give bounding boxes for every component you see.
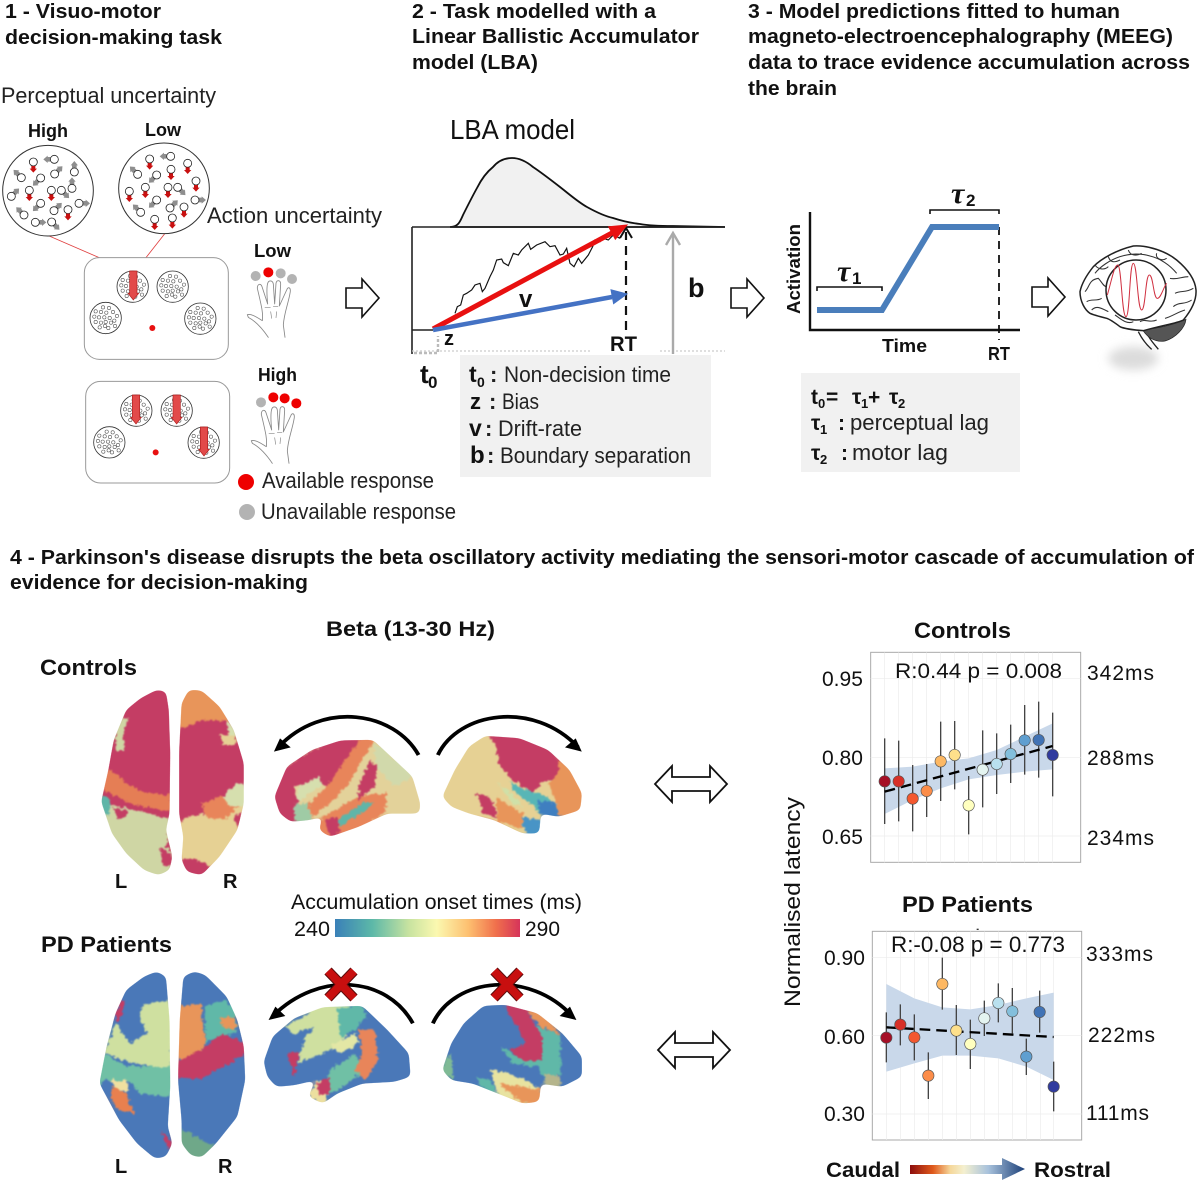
- low uncertainty dot cloud: [119, 143, 209, 234]
- colour scale: Accumulation onset times (ms): [291, 891, 582, 914]
- parameter key box: Bias: [502, 389, 539, 414]
- right ticks: 333ms: [1086, 943, 1153, 966]
- RT dashed line: [620, 228, 632, 330]
- equation key box: [801, 373, 1020, 472]
- label: low action: Low: [254, 241, 292, 261]
- equation key box: :: [838, 412, 845, 435]
- activation chart: τ: [951, 177, 966, 210]
- equation key box: 0: [818, 396, 825, 411]
- arrow: task to model: [346, 279, 379, 317]
- label: RT: RT: [610, 333, 637, 356]
- parameter key box: z: [470, 389, 481, 414]
- heading 1: [5, 1, 223, 49]
- double arrow: controls: [655, 766, 727, 802]
- statistics: R:-0.08 p = 0.773: [891, 932, 1065, 957]
- brain: PD lateral right: [443, 1005, 582, 1104]
- L/R labels: controls: L: [115, 871, 127, 893]
- statistics: R:0.44 p = 0.008: [895, 660, 1062, 683]
- chart: PD patients: [824, 892, 1155, 1140]
- LBA diagram axes: [412, 227, 725, 354]
- left ticks: 0.65: [822, 826, 863, 849]
- arrow: b boundary: [666, 233, 680, 354]
- heading 2: [412, 1, 699, 74]
- chart plot area: [872, 929, 1082, 1140]
- high uncertainty dot cloud: [3, 145, 93, 236]
- brain: PD top right: [178, 972, 246, 1157]
- heading 3: the brain: [748, 78, 837, 100]
- label: high perceptual: High: [28, 121, 68, 141]
- panel 3: model predictions: [748, 1, 1196, 472]
- panel 4: brain maps: [40, 618, 587, 1178]
- parameter key box: t: [469, 361, 477, 387]
- screen: low action uncertainty: [84, 258, 228, 359]
- caudal to rostral gradient arrow: Caudal: [826, 1159, 900, 1182]
- right ticks: 234ms: [1087, 827, 1154, 850]
- equation key box: +: [868, 386, 880, 409]
- brain: controls top left: [102, 690, 172, 874]
- left ticks: [822, 668, 863, 849]
- label: perceptual uncertainty: Perceptual uncertainty: [1, 83, 216, 108]
- label: high action: High: [258, 365, 297, 385]
- panel 1: visuo-motor task: [1, 1, 456, 524]
- caudal to rostral gradient arrow: Rostral: [1034, 1159, 1111, 1182]
- right ticks: 288ms: [1087, 747, 1154, 770]
- heading 4: [10, 547, 1194, 594]
- brains: PD patients: [94, 967, 587, 1163]
- parameter key box: :: [485, 416, 492, 441]
- connector lines: [48, 233, 165, 272]
- heading 3: [748, 1, 1190, 100]
- L/R labels: PD: L: [115, 1156, 127, 1178]
- colour scale: 290: [525, 918, 560, 941]
- right ticks: [1086, 943, 1155, 1125]
- heading 3: magneto-electroencephalography (MEEG): [748, 26, 1173, 48]
- parameter key box: 0: [477, 374, 485, 390]
- screen: high action uncertainty: [86, 381, 230, 483]
- heading 1: 1 - Visuo-motor: [5, 1, 161, 23]
- label: b: b: [688, 273, 704, 303]
- cross mark: left: [328, 971, 354, 998]
- label: action uncertainty: Action uncertainty: [207, 203, 382, 228]
- L/R labels: PD: R: [218, 1156, 233, 1178]
- L/R labels: PD: [115, 1156, 233, 1178]
- heading 4: 4 - Parkinson's disease disrupts the beta oscillatory activity mediating the sensori-motor cascade of accumulation of: [10, 547, 1194, 569]
- parameter key box: Drift-rate: [498, 416, 582, 441]
- curved arrow: PD right: [433, 985, 576, 1023]
- legend: Unavailable response: [261, 499, 456, 524]
- curved arrow: PD left: [269, 985, 413, 1023]
- equation key box: t: [811, 386, 818, 409]
- equation key box: =: [826, 386, 838, 409]
- parameter key box: :: [490, 362, 497, 387]
- colour scale: 240: [294, 918, 330, 941]
- equation key box: τ: [811, 412, 821, 435]
- L/R labels: controls: R: [223, 871, 238, 893]
- heading 2: Linear Ballistic Accumulator: [412, 26, 699, 48]
- left ticks: 0.30: [824, 1103, 865, 1126]
- left ticks: 0.95: [822, 668, 863, 691]
- heading 1: decision-making task: [5, 27, 223, 49]
- label: controls: Controls: [40, 655, 137, 680]
- parameter key box: Boundary separation: [500, 443, 691, 468]
- activation chart: 1: [852, 269, 861, 288]
- title: beta band: Beta (13-30 Hz): [326, 618, 495, 641]
- equation key box: 2: [898, 396, 905, 411]
- legend: Available response: [262, 468, 434, 493]
- brains: controls: [91, 680, 587, 883]
- heading 4: evidence for decision-making: [10, 572, 308, 594]
- right ticks: 342ms: [1087, 662, 1154, 685]
- legend: [238, 468, 456, 524]
- brain: PD lateral left: [264, 1006, 410, 1102]
- hand: high: [251, 392, 301, 463]
- equation key box: 1: [861, 396, 868, 411]
- y axis label: Normalised latency: [780, 797, 805, 1007]
- double arrow: PD: [658, 1032, 730, 1068]
- parameter key box: :: [489, 389, 496, 414]
- left ticks: [824, 947, 865, 1126]
- chart title: Controls: [914, 618, 1011, 643]
- label: LBA model: LBA model: [450, 114, 575, 145]
- panel 2: LBA model: [412, 1, 725, 477]
- activation chart: τ: [837, 255, 852, 288]
- activation chart: RT: [988, 344, 1010, 364]
- brain: PD top left: [100, 972, 172, 1158]
- arrow: predictions to brain: [1032, 278, 1065, 316]
- activation chart: Time: [882, 336, 927, 356]
- right ticks: 222ms: [1088, 1024, 1155, 1047]
- right ticks: 111ms: [1086, 1102, 1149, 1125]
- activation chart: [784, 177, 1020, 364]
- chart: controls: [822, 618, 1154, 862]
- cross mark: right: [494, 971, 520, 998]
- heading 3: 3 - Model predictions fitted to human: [748, 1, 1120, 23]
- noisy evidence trace: [455, 235, 620, 313]
- chart title: PD Patients: [902, 892, 1033, 917]
- label: z: z: [444, 328, 454, 350]
- label: low perceptual: Low: [145, 120, 182, 140]
- L/R labels: controls: [115, 871, 238, 893]
- label: t0: t: [420, 359, 429, 389]
- parameter key box: b: [470, 442, 485, 469]
- equation key box: 2: [820, 452, 827, 467]
- label: v: v: [519, 286, 533, 313]
- label: PD patients: PD Patients: [41, 932, 172, 957]
- equation key box: motor lag: [852, 440, 948, 465]
- heading 2: 2 - Task modelled with a: [412, 1, 657, 23]
- heading 2: model (LBA): [412, 52, 538, 74]
- density curve: [450, 158, 725, 227]
- left ticks: 0.90: [824, 947, 865, 970]
- arrow: blue drift: [433, 290, 627, 330]
- left ticks: 0.60: [824, 1026, 865, 1049]
- curved arrow: controls left: [274, 717, 419, 755]
- brain: controls lateral left: [275, 740, 420, 836]
- stimuli and screens: [3, 143, 301, 483]
- activation chart: 2: [966, 191, 975, 210]
- heading 3: data to trace evidence accumulation across: [748, 52, 1190, 74]
- right ticks: [1087, 662, 1154, 850]
- curved arrow: controls right: [438, 717, 582, 755]
- arrow: red drift: [433, 225, 627, 329]
- hand: low: [247, 267, 297, 337]
- activation chart: Activation: [784, 224, 804, 314]
- equation key box: :: [841, 442, 848, 465]
- equation key box: τ: [811, 442, 821, 465]
- parameter key box: [460, 355, 711, 477]
- label: t0: [420, 359, 437, 392]
- icon: brain with oscillation: [1080, 246, 1196, 370]
- equation key box: 1: [820, 422, 827, 437]
- label: t0: 0: [428, 373, 437, 392]
- brain: controls lateral right: [444, 736, 582, 834]
- left ticks: 0.80: [822, 747, 863, 770]
- chart plot area: [871, 652, 1081, 862]
- parameter key box: Non-decision time: [504, 362, 671, 387]
- arrow: model to predictions: [731, 279, 764, 317]
- parameter key box: v: [469, 415, 482, 441]
- colour scale: [291, 891, 582, 941]
- parameter key box: :: [487, 443, 494, 468]
- brain: controls top right: [179, 690, 244, 874]
- equation key box: perceptual lag: [850, 410, 989, 435]
- caudal to rostral gradient arrow: [826, 1158, 1111, 1182]
- equation key box: τ: [889, 386, 899, 409]
- equation key box: τ: [852, 386, 862, 409]
